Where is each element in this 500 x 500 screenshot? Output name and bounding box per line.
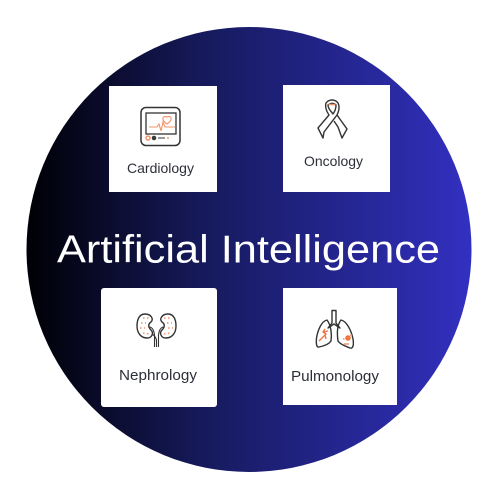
- label: Cardiology: Cardiology: [127, 160, 194, 176]
- label: Pulmonology: Pulmonology: [291, 368, 380, 385]
- icon: kidneys: [137, 314, 176, 347]
- gradient circle background: [26, 27, 472, 472]
- panel: oncology: [283, 85, 390, 192]
- label: Nephrology: Nephrology: [119, 367, 198, 384]
- panel: pulmonology: [283, 288, 397, 405]
- icon: lungs: [316, 310, 353, 348]
- icon: ribbon: [318, 100, 347, 138]
- title: Artificial Intelligence: [57, 228, 440, 272]
- icon: heart monitor: [141, 108, 180, 146]
- panel: nephrology: [101, 288, 217, 407]
- label: Oncology: Oncology: [304, 153, 363, 169]
- panel: cardiology: [109, 86, 217, 192]
